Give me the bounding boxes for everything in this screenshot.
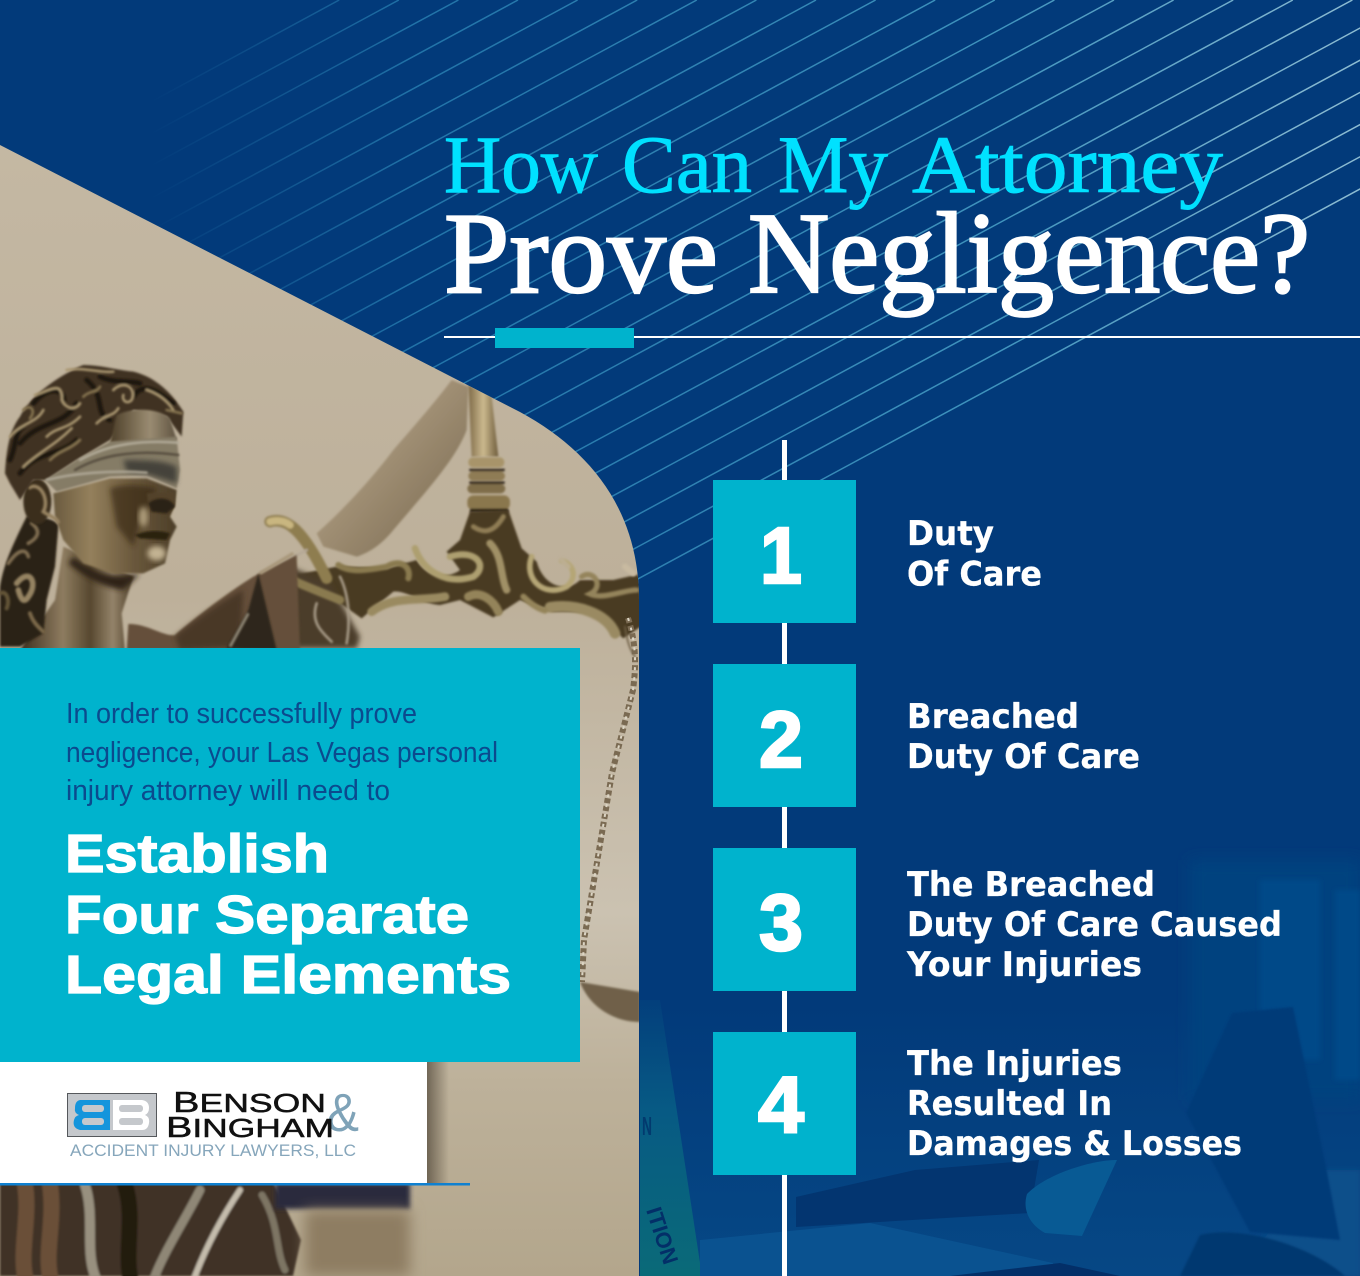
step 1: 1 xyxy=(760,511,802,600)
title: Can xyxy=(622,119,752,210)
logo wordmark xyxy=(70,1087,356,1160)
step 4: The Injuries xyxy=(907,1044,1122,1084)
statue head and shoulder xyxy=(0,365,300,650)
background photo: tinted injured person on floor: ITION xyxy=(641,1204,683,1267)
lower drapery xyxy=(0,1180,301,1276)
step 1 xyxy=(713,480,1042,623)
diagonal stripes pattern xyxy=(0,0,1360,594)
step 2: 2 xyxy=(759,695,803,784)
step 3: Duty Of Care Caused xyxy=(907,905,1282,945)
white box shadow xyxy=(427,1062,446,1183)
title: How xyxy=(444,119,598,210)
timeline vertical line xyxy=(782,440,787,1276)
step 3 xyxy=(713,848,1282,991)
logo ampersand: & xyxy=(327,1083,359,1143)
step 3: 3 xyxy=(759,878,803,967)
step 2: Duty Of Care xyxy=(907,737,1140,777)
forehead xyxy=(110,410,177,443)
logo wordmark: B ENSON xyxy=(173,1087,326,1119)
chain xyxy=(582,618,635,982)
step 4: Resulted In xyxy=(907,1084,1112,1124)
title xyxy=(444,119,1310,318)
background photo: tinted injured person on floor xyxy=(640,860,1360,1276)
intro text: negligence, your Las Vegas personal xyxy=(66,737,498,769)
intro text: In order to successfully prove xyxy=(66,698,417,730)
step 1: Duty xyxy=(907,514,994,554)
step 2: Breached xyxy=(907,697,1079,737)
step 3: Your Injuries xyxy=(906,945,1142,985)
key statement xyxy=(65,824,511,1005)
key statement: Establish xyxy=(65,824,329,884)
panel: logo box xyxy=(0,1062,470,1186)
step 2 xyxy=(713,664,1140,807)
step 4: 4 xyxy=(758,1060,805,1149)
step 1: Of Care xyxy=(907,554,1042,594)
title: Negligence? xyxy=(748,190,1310,318)
photo panel: statue of Lady Justice xyxy=(0,140,643,1276)
braided hair xyxy=(0,517,58,647)
logo icon xyxy=(68,1094,156,1136)
intro text: injury attorney will need to xyxy=(66,775,390,807)
scale pan xyxy=(580,982,640,1022)
shoulder xyxy=(127,555,300,650)
title: My xyxy=(778,119,888,210)
blindfold xyxy=(45,437,180,492)
step 4: Damages & Losses xyxy=(907,1124,1242,1164)
face xyxy=(53,478,177,573)
neck xyxy=(20,547,133,650)
ear xyxy=(23,479,51,524)
hair xyxy=(5,365,183,500)
key statement: Legal Elements xyxy=(65,945,511,1005)
key statement: Four Separate xyxy=(65,885,469,945)
title: Attorney xyxy=(912,119,1223,210)
step 3: The Breached xyxy=(907,865,1155,905)
background photo: tinted injured person on floor: N xyxy=(642,1111,652,1141)
title rule with accent bar xyxy=(444,328,1360,348)
step 4 xyxy=(713,1032,1242,1175)
intro text xyxy=(66,698,498,807)
blurred background behind statue xyxy=(275,1183,410,1276)
logo wordmark: B INGHAM xyxy=(166,1112,334,1144)
logo wordmark: ACCIDENT INJURY LAWYERS, LLC xyxy=(70,1141,356,1160)
scales: arm, pole and ornate beam xyxy=(260,380,643,657)
title: Prove xyxy=(444,190,718,318)
panel: teal intro box xyxy=(0,648,580,1062)
